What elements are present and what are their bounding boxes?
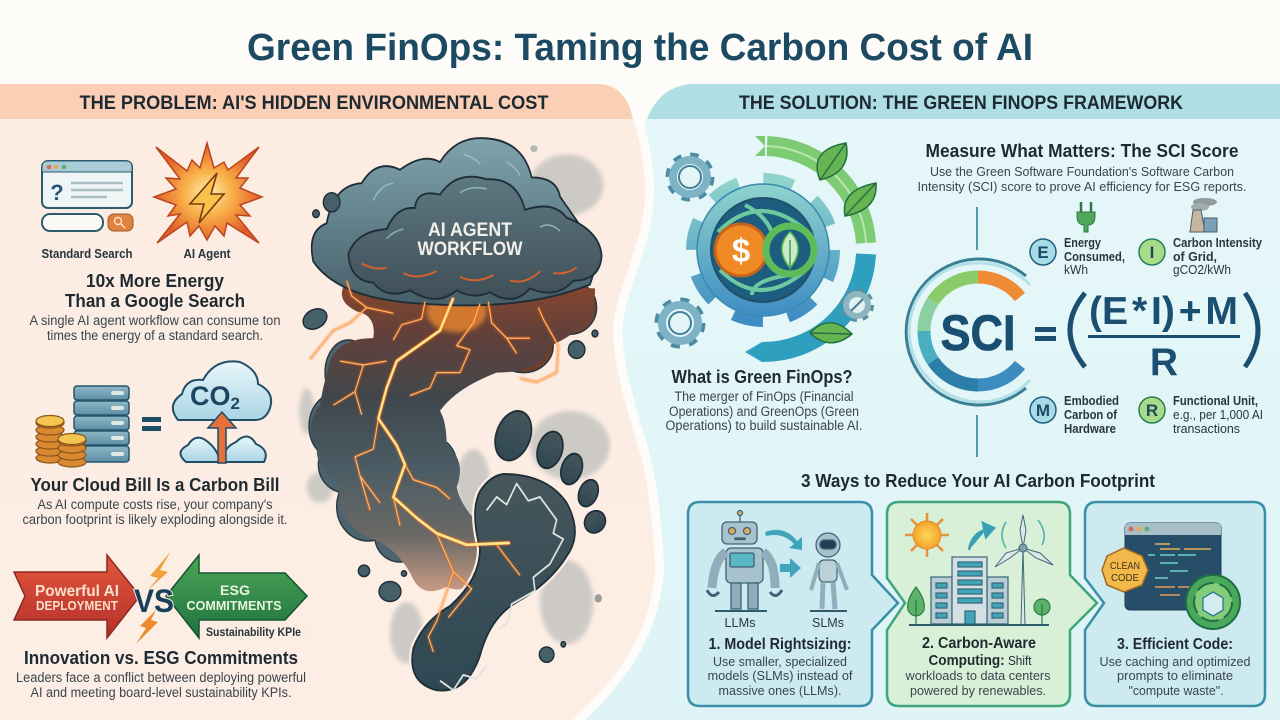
heading: 3 ways: 3 Ways to Reduce Your AI Carbon Footprint [801, 471, 1155, 491]
text: card 1 [708, 636, 853, 698]
text block: cloud bill: carbon footprint is likely exploding alongside it. [22, 512, 288, 527]
label: LLMs: LLMs [724, 615, 756, 630]
legend: embodied carbon: Carbon of [1064, 408, 1118, 422]
text block: innovation vs ESG [16, 647, 306, 700]
badge: E [1030, 239, 1056, 265]
icon: plug [1077, 202, 1095, 232]
text: card 3: Use caching and optimized [1100, 654, 1250, 669]
badge: R: R [1146, 401, 1158, 420]
legend: carbon intensity: Carbon Intensity [1173, 236, 1262, 250]
formula: equation [1035, 290, 1258, 384]
formula: SCI: SCI [940, 305, 1016, 361]
glow under cloud [427, 290, 487, 332]
lower lightning over foot [428, 533, 520, 652]
legend: functional unit [1173, 394, 1263, 436]
text block: SCI score: Use the Green Software Foundation's Software Carbon [930, 164, 1234, 179]
icon: small gear bottom [658, 301, 702, 345]
back cloud [312, 138, 600, 305]
label: AI agent workflow: AI AGENT [428, 220, 512, 241]
arrow: ESG commitments: ESG [220, 582, 250, 598]
text block: cloud bill [22, 474, 288, 527]
text block: what is green finops: What is Green FinOps? [672, 366, 852, 387]
panel: problem background [0, 119, 655, 720]
debris [301, 193, 598, 662]
panel: solution background [560, 84, 1280, 720]
panel: solution header [647, 84, 1280, 119]
text: card 2: 2. Carbon-Aware [922, 635, 1036, 652]
panel: card 2 carbon-aware [887, 502, 1097, 706]
legend: energy [1064, 236, 1125, 277]
circular arrow [767, 146, 866, 243]
legend: energy: Consumed, [1064, 250, 1125, 264]
label: AI agent workflow [418, 220, 523, 260]
legend: carbon intensity: of Grid, [1173, 250, 1217, 264]
legend: functional unit: Functional Unit, [1173, 394, 1258, 408]
text: card 3: 3. Efficient Code: [1117, 636, 1233, 653]
text block: what is green finops [666, 366, 862, 433]
text: card 3: prompts to eliminate [1117, 668, 1233, 683]
text block: innovation vs ESG: Leaders face a conflict between deploying powerful [16, 670, 306, 685]
icon: trees [908, 587, 1050, 625]
icon: equals sign [142, 417, 161, 431]
legend: carbon intensity [1173, 236, 1262, 277]
arrow: powerful AI deployment: DEPLOYMENT [36, 599, 118, 613]
legend: carbon intensity: gCO2/kWh [1173, 263, 1231, 277]
title: Green FinOps: Taming the Carbon Cost of AI [247, 27, 1033, 69]
text block: innovation vs ESG: Innovation vs. ESG Commitments [24, 647, 298, 668]
text: card 3: "compute waste". [1128, 683, 1224, 698]
text: card 3 [1100, 636, 1250, 698]
icon: clean code badge: CODE [1111, 572, 1139, 584]
lightning branches [310, 281, 558, 526]
legend: embodied carbon [1064, 394, 1119, 436]
text block: what is green finops: Operations) and GreenOps (Green [669, 404, 859, 419]
legend: functional unit: transactions [1173, 422, 1240, 436]
text block: SCI score [918, 140, 1246, 194]
icon: clean code badge [1102, 548, 1148, 592]
icon: code window [1125, 523, 1221, 610]
text block: what is green finops: The merger of FinOps (Financial [674, 389, 854, 404]
icon: sun [905, 513, 949, 557]
arrow: ESG commitments [166, 555, 307, 638]
icon: green finops gear [693, 136, 876, 362]
text: card 1: models (SLMs) instead of [708, 668, 853, 683]
label: sustainability KPIs: Sustainability KPIe [206, 627, 301, 639]
icon: CO2 cloud with arrow: 2 [231, 394, 240, 413]
label: sustainability KPIs [200, 622, 308, 640]
text block: innovation vs ESG: AI and meeting board-level sustainability KPIs. [30, 685, 292, 700]
text: card 2: Computing: Shift [928, 652, 1032, 669]
icon: large robot [707, 510, 782, 611]
chart: SCI ring gauge [906, 259, 1030, 405]
icon: VS with bolts: VS [134, 583, 174, 619]
label: standard search: Standard Search [42, 247, 132, 261]
text: card 1: massive ones (LLMs). [718, 683, 842, 698]
icon: building [931, 557, 1008, 624]
badge: E: E [1037, 243, 1049, 262]
smoke lobes [309, 281, 597, 562]
icon: factory [1190, 198, 1217, 232]
text: card 2 [905, 635, 1051, 698]
legend: energy: Energy [1064, 236, 1101, 250]
badge: I: I [1150, 243, 1154, 262]
text block: 10x more energy: times the energy of a standard search. [47, 328, 263, 343]
main lightning bolt [378, 298, 510, 545]
badge: M: M [1036, 401, 1050, 420]
label: AI agent: AI Agent [184, 247, 231, 261]
text block: SCI score: Measure What Matters: The SCI Score [926, 140, 1238, 161]
text block: what is green finops: Operations) to build sustainable AI. [666, 418, 862, 433]
illustration: storm cloud and carbon footprint [299, 138, 610, 691]
icon: explosion with lightning [154, 143, 262, 243]
arrow: powerful AI deployment: Powerful AI [35, 583, 119, 600]
legend: embodied carbon: Embodied [1064, 394, 1119, 408]
legend: energy: kWh [1064, 263, 1088, 277]
icon: green finops gear: $ [732, 232, 750, 269]
icon: transfer arrows [765, 530, 802, 578]
icon: wind turbine [995, 515, 1053, 625]
icon: browser search window [42, 161, 133, 231]
icon: VS with bolts [134, 551, 174, 644]
heading: problem: THE PROBLEM: AI'S HIDDEN ENVIRONMENTAL COST [80, 93, 549, 114]
panel: problem header [0, 84, 633, 119]
leaf ring [766, 226, 814, 274]
text block: 10x more energy: A single AI agent workflow can consume ton [30, 313, 280, 328]
badge: I [1139, 239, 1165, 265]
badge: R [1139, 397, 1165, 423]
label: AI agent workflow: WORKFLOW [418, 239, 523, 260]
smoke column [311, 281, 595, 591]
panel: card 3 efficient code [1085, 502, 1265, 706]
legend: embodied carbon: Hardware [1064, 422, 1116, 436]
coin [715, 224, 767, 276]
arrow: powerful AI deployment [14, 555, 140, 638]
text: card 2: workloads to data centers [905, 668, 1051, 683]
text block: cloud bill: As AI compute costs rise, your company's [38, 497, 273, 512]
icon: CO2 cloud with arrow: CO [190, 381, 231, 411]
icon: small gear right [843, 291, 871, 319]
icon: small robot [810, 533, 847, 611]
text block: 10x more energy: 10x More Energy [86, 270, 225, 291]
text: card 2: powered by renewables. [910, 683, 1046, 698]
formula: equation: (E * I) + M [1089, 290, 1238, 333]
text block: cloud bill: Your Cloud Bill Is a Carbon Bill [30, 474, 280, 495]
icon: servers and coins [36, 386, 129, 467]
badge: M [1030, 397, 1056, 423]
text: card 1: Use smaller, specialized [713, 654, 847, 669]
icon: curved arrow [969, 523, 994, 550]
front cloud [348, 177, 602, 299]
formula: equation: R [1150, 341, 1178, 384]
text block: SCI score: Intensity (SCI) score to prove AI efficiency for ESG reports. [918, 179, 1246, 194]
icon: browser search window: ? [50, 180, 64, 205]
text block: 10x more energy [30, 270, 280, 343]
label: SLMs: SLMs [812, 615, 844, 630]
leaves [810, 143, 876, 343]
panel: card 1 model rightsizing [688, 502, 898, 706]
legend: functional unit: e.g., per 1,000 AI [1173, 408, 1263, 422]
icon: optimization cycle [1186, 575, 1240, 629]
arrow: ESG commitments: COMMITMENTS [186, 599, 282, 613]
icon: clean code badge: CLEAN [1110, 560, 1140, 572]
foot sole [412, 474, 575, 691]
heading: solution: THE SOLUTION: THE GREEN FINOPS FRAMEWORK [739, 93, 1183, 114]
icon: CO2 cloud with arrow [173, 361, 271, 463]
text block: 10x more energy: Than a Google Search [65, 290, 245, 311]
icon: small gear top [669, 156, 711, 198]
foot toes [488, 404, 609, 537]
text: card 1: 1. Model Rightsizing: [708, 636, 852, 653]
